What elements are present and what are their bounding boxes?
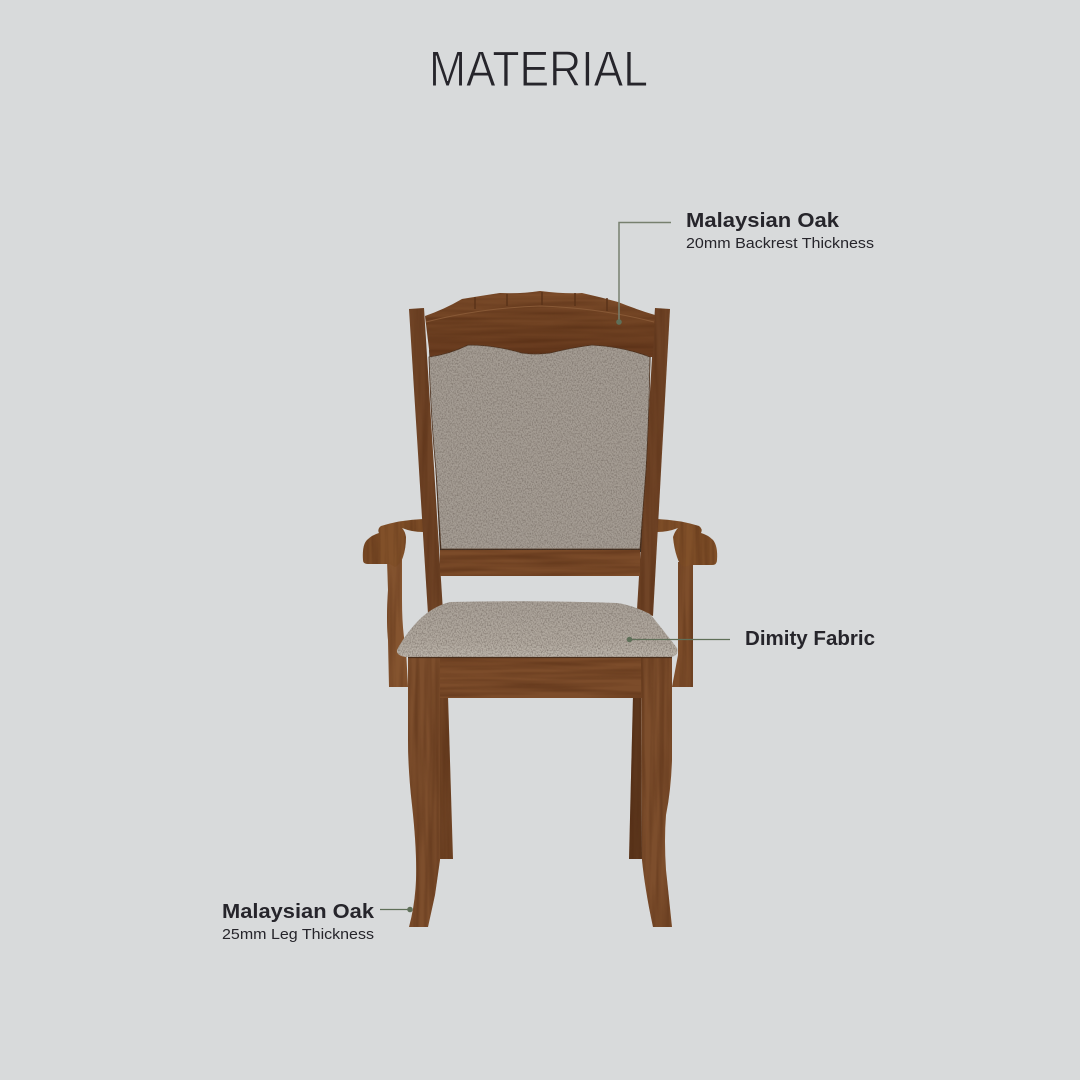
front apron [436, 656, 642, 698]
upholstery shadow backing [429, 350, 651, 552]
callout detail: 25mm Leg Thickness [222, 927, 374, 943]
seat shadow [408, 656, 672, 658]
right arm support [672, 562, 693, 687]
title: MATERIAL [429, 41, 648, 97]
back legs [440, 696, 642, 859]
right arm rest [657, 519, 717, 567]
right front leg [641, 656, 672, 927]
leader dot [407, 907, 413, 912]
callout heading: Dimity Fabric [745, 628, 875, 650]
callout: leg material [222, 901, 413, 943]
back upholstery [429, 345, 650, 549]
callout heading: Malaysian Oak [222, 901, 375, 923]
leader dot [627, 637, 632, 642]
leader dot [616, 319, 622, 325]
left back post [409, 308, 443, 614]
callout: seat fabric [627, 628, 875, 650]
right back post [637, 308, 670, 616]
callout detail: 20mm Backrest Thickness [686, 236, 874, 252]
crest carving notches [475, 292, 607, 311]
callout: backrest material [616, 210, 874, 325]
carved crest rail [425, 291, 655, 357]
seat cushion [397, 601, 677, 657]
chair illustration [363, 291, 717, 927]
left front leg [408, 656, 440, 927]
lower back rail [440, 550, 640, 576]
callout heading: Malaysian Oak [686, 210, 840, 232]
crest rail carved line [426, 306, 654, 322]
left arm rest [363, 519, 423, 567]
leader line [380, 908, 410, 910]
leader line [619, 222, 671, 320]
leader line [630, 638, 730, 640]
left arm support [387, 560, 408, 687]
